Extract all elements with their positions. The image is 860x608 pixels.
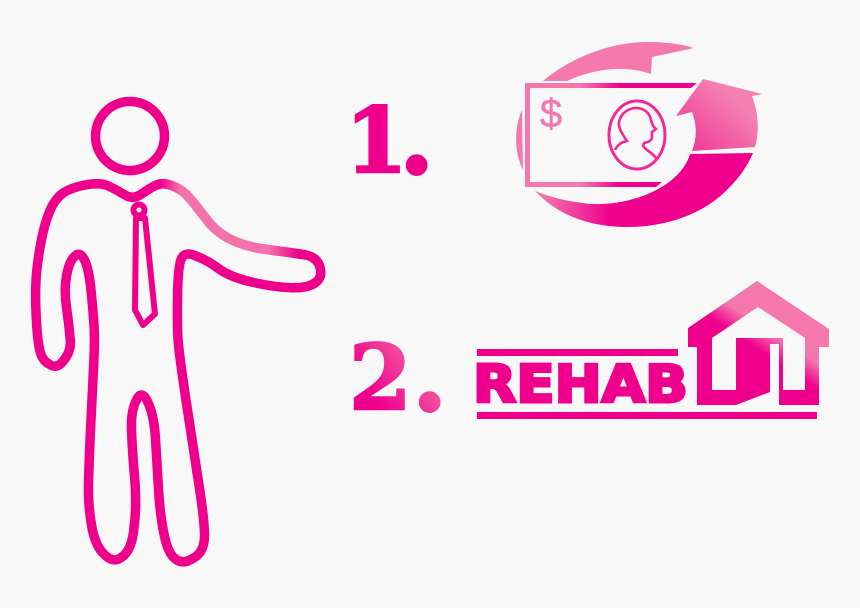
left sliver of arc (516, 110, 523, 170)
top arrow arc (543, 42, 694, 81)
portrait silhouette (615, 108, 657, 160)
upper arrow (676, 79, 762, 151)
number 2: 2 (349, 325, 412, 431)
icon: money with circular arrows (516, 42, 762, 227)
number 1: 1 (345, 88, 408, 194)
top bar (477, 349, 678, 356)
icon: house (688, 281, 829, 405)
lower swoosh (535, 153, 753, 227)
tie (135, 218, 155, 325)
bottom bar (477, 412, 817, 419)
portrait oval (609, 101, 665, 169)
body outline (36, 184, 321, 562)
logo: rehab with house (473, 281, 829, 419)
arm highlight (156, 184, 306, 255)
head (96, 102, 164, 170)
banknote frame (525, 83, 697, 187)
number 1: . (401, 88, 432, 194)
tie knot (134, 204, 144, 216)
word REHAB: REHAB (473, 355, 688, 415)
dollar sign: $ (540, 92, 562, 136)
figure: man in tie presenting (36, 102, 321, 562)
number 2: . (414, 325, 445, 431)
